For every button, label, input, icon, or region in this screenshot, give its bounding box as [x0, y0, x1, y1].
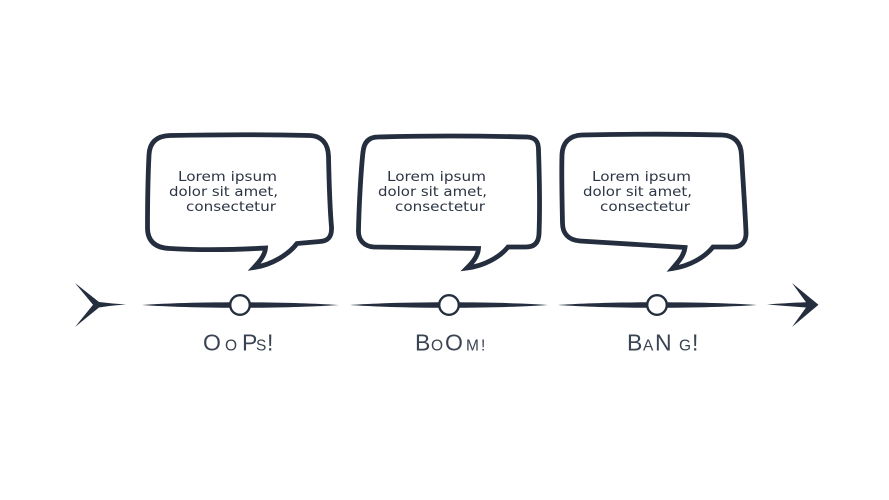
bubble text one: consectetur: [186, 200, 277, 215]
bubble text two: [378, 170, 487, 215]
bubble outline two: [358, 136, 540, 268]
timeline segment two with marker: [350, 295, 548, 315]
bubble text three: consectetur: [600, 200, 691, 215]
arrow: timeline end arrowhead: [767, 283, 818, 327]
bubble text one: Lorem ipsum: [178, 170, 277, 185]
label: OoPs!: !: [267, 330, 273, 356]
label: BaNg!: B: [627, 330, 642, 356]
label: BoOm!: !: [481, 338, 485, 354]
panel: speech bubble three: [562, 134, 746, 268]
bubble text two: dolor sit amet,: [378, 185, 487, 200]
panel: speech bubble two: [358, 136, 540, 268]
bubble text one: [169, 170, 278, 215]
label: OoPs!: P: [242, 330, 257, 356]
arrow: timeline start fletching: [75, 283, 126, 327]
bubble text three: [583, 170, 692, 215]
label: BaNg!: N: [655, 330, 672, 356]
panel: speech bubble one: [148, 135, 332, 268]
label: BoOm!: O: [445, 330, 463, 356]
label: OoPs!: O: [203, 330, 221, 356]
label: BoOm!: B: [415, 330, 430, 356]
bubble text three: dolor sit amet,: [583, 185, 692, 200]
timeline segment three with marker: [558, 295, 757, 315]
label: BaNg!: !: [692, 330, 698, 356]
label: BoOm!: O: [431, 338, 443, 354]
bubble text three: Lorem ipsum: [592, 170, 691, 185]
label: BaNg!: G: [679, 338, 691, 354]
label: OoPs!: O: [225, 338, 237, 354]
bubble outline one: [148, 135, 332, 268]
label: BaNg!: A: [643, 338, 654, 354]
bubble text two: Lorem ipsum: [387, 170, 486, 185]
bubble outline three: [562, 134, 746, 268]
bubble text two: consectetur: [395, 200, 486, 215]
bubble text one: dolor sit amet,: [169, 185, 278, 200]
timeline segment one with marker: [142, 295, 339, 315]
label: OoPs!: S: [256, 338, 266, 354]
label: BoOm!: M: [466, 338, 479, 354]
